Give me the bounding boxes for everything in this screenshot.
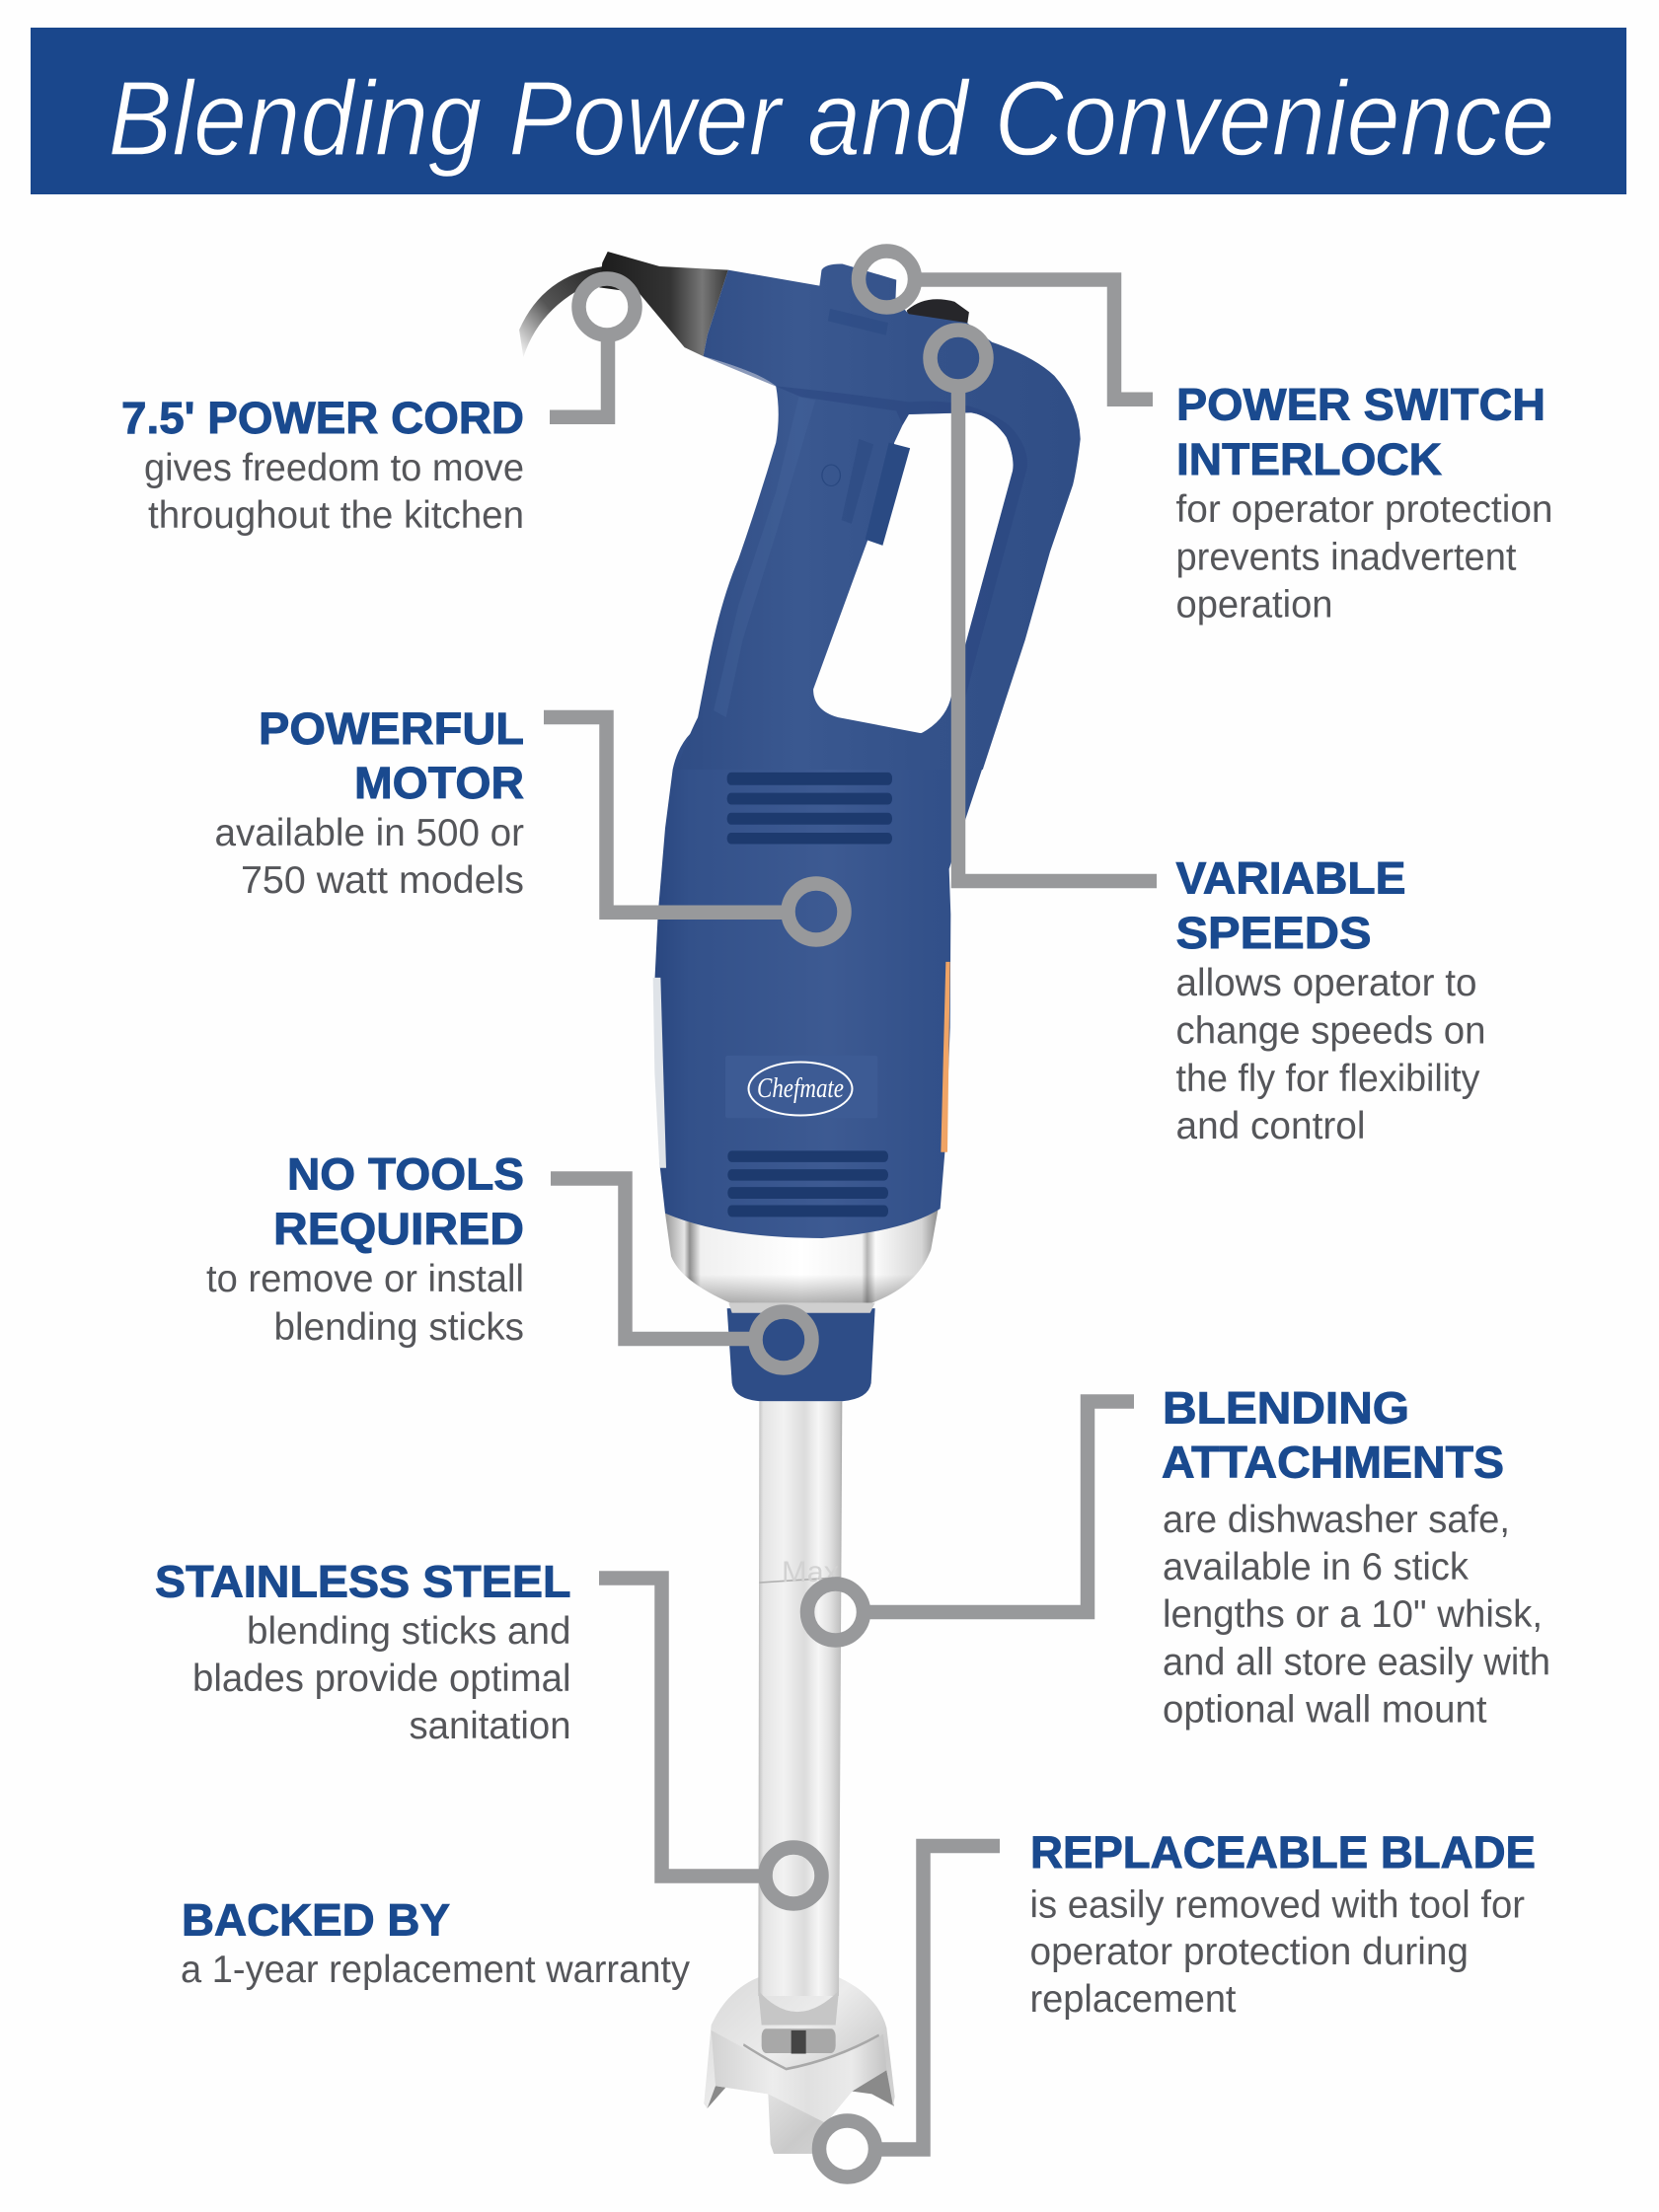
description: blending sticks and (247, 1610, 570, 1653)
callout: variable speeds (1176, 852, 1486, 1147)
description: change speeds on (1176, 1010, 1486, 1052)
white side label (653, 978, 666, 1168)
heading: 7.5' POWER CORD (121, 393, 524, 443)
description: 750 watt models (241, 859, 524, 902)
description: throughout the kitchen (148, 494, 524, 537)
description: sanitation (409, 1705, 570, 1747)
description: prevents inadvertent (1176, 537, 1517, 578)
heading: ATTACHMENTS (1162, 1437, 1504, 1488)
Chefmate logo (748, 1062, 853, 1115)
stainless steel shaft and blade guard (704, 1401, 895, 2154)
description (215, 812, 524, 902)
description: for operator protection (1176, 488, 1553, 531)
chrome bell (665, 1209, 939, 1303)
callout leader: no tools required (551, 1178, 811, 1367)
description (206, 1258, 524, 1349)
description: optional wall mount (1163, 1689, 1487, 1731)
guard feet shadows (704, 2070, 894, 2108)
description: and all store easily with (1163, 1642, 1550, 1683)
handle shadow band (704, 356, 1027, 706)
cord plug (599, 252, 728, 356)
description (192, 1610, 570, 1747)
heading: POWERFUL (259, 703, 524, 754)
description: available in 500 or (215, 812, 524, 854)
logo plate (725, 1056, 877, 1118)
heading: NO TOOLS (287, 1148, 524, 1200)
orange warning label (941, 962, 950, 1152)
heading: REQUIRED (273, 1204, 524, 1254)
heading: POWER SWITCH (1176, 379, 1546, 430)
title banner (31, 28, 1626, 194)
description (1163, 1499, 1550, 1731)
lower vents (727, 1150, 888, 1217)
callout: power cord (121, 393, 524, 537)
callout: replaceable blade (1030, 1827, 1536, 2021)
motor housing and collar (653, 704, 1004, 1401)
description: operator protection during (1030, 1931, 1469, 1973)
description: blending sticks (274, 1306, 524, 1349)
heading (1176, 852, 1405, 958)
guard rim highlight (743, 2035, 879, 2069)
shaft tube (758, 1401, 842, 1996)
description: gives freedom to move (144, 447, 524, 489)
motor housing (654, 704, 1004, 1238)
callout: powerful motor (215, 703, 524, 902)
description (1030, 1884, 1525, 2021)
callout: power switch interlock (1176, 379, 1553, 626)
callout leader: stainless steel (599, 1579, 821, 1904)
description: a 1-year replacement warranty (181, 1949, 691, 1991)
on off marking (822, 465, 840, 485)
callout: backed by warranty (181, 1894, 691, 1991)
callout leader: replaceable blade (819, 1846, 1000, 2176)
handle body with grip opening (676, 263, 1081, 770)
heading: MOTOR (354, 758, 524, 808)
black rotary knob (907, 299, 969, 327)
handle and power cord (519, 252, 1081, 770)
heading: STAINLESS STEEL (155, 1557, 570, 1606)
heading: VARIABLE (1176, 852, 1405, 904)
callout leader: power cord (550, 278, 636, 417)
blue neck collar (727, 1308, 875, 1401)
description (1176, 962, 1486, 1147)
trigger switch (866, 443, 910, 546)
fill line (759, 1578, 841, 1583)
heading: BLENDING (1163, 1383, 1409, 1433)
description: is easily removed with tool for (1030, 1884, 1525, 1926)
description: available in 6 stick (1163, 1546, 1470, 1588)
description: to remove or install (206, 1258, 524, 1300)
description: and control (1176, 1105, 1366, 1147)
heading: REPLACEABLE BLADE (1030, 1827, 1536, 1878)
shaft base rings (758, 1991, 839, 2026)
description: operation (1176, 584, 1332, 626)
power cord (519, 266, 605, 357)
description: allows operator to (1176, 962, 1476, 1004)
heading (1162, 1383, 1504, 1488)
heading: BACKED BY (182, 1894, 450, 1946)
heading (273, 1148, 524, 1254)
heading (1176, 379, 1546, 484)
upper vents (727, 773, 892, 844)
callout: stainless steel (155, 1557, 570, 1747)
description: the fly for flexibility (1176, 1058, 1480, 1100)
callout: blending attachments (1162, 1383, 1550, 1731)
immersion blender product illustration (519, 252, 1081, 2154)
description: replacement (1030, 1978, 1237, 2021)
heading: SPEEDS (1176, 908, 1372, 958)
callout: no tools required (206, 1148, 524, 1349)
description: blades provide optimal (192, 1658, 570, 1700)
heading (259, 703, 524, 808)
description (1176, 488, 1553, 626)
heading: INTERLOCK (1176, 434, 1443, 484)
Chefmate logo: Chefmate (757, 1072, 844, 1104)
callout leader: power switch interlock (859, 251, 1153, 400)
grip highlights (714, 397, 815, 717)
description: are dishwasher safe, (1163, 1499, 1510, 1541)
description (144, 447, 524, 537)
callout leader: variable speeds (930, 330, 1157, 881)
blade guard (704, 1977, 895, 2154)
callout leader: powerful motor (544, 717, 845, 939)
description: lengths or a 10" whisk, (1163, 1593, 1543, 1636)
Max marking: Max (782, 1556, 839, 1588)
callout leader: blending attachments (807, 1401, 1134, 1640)
